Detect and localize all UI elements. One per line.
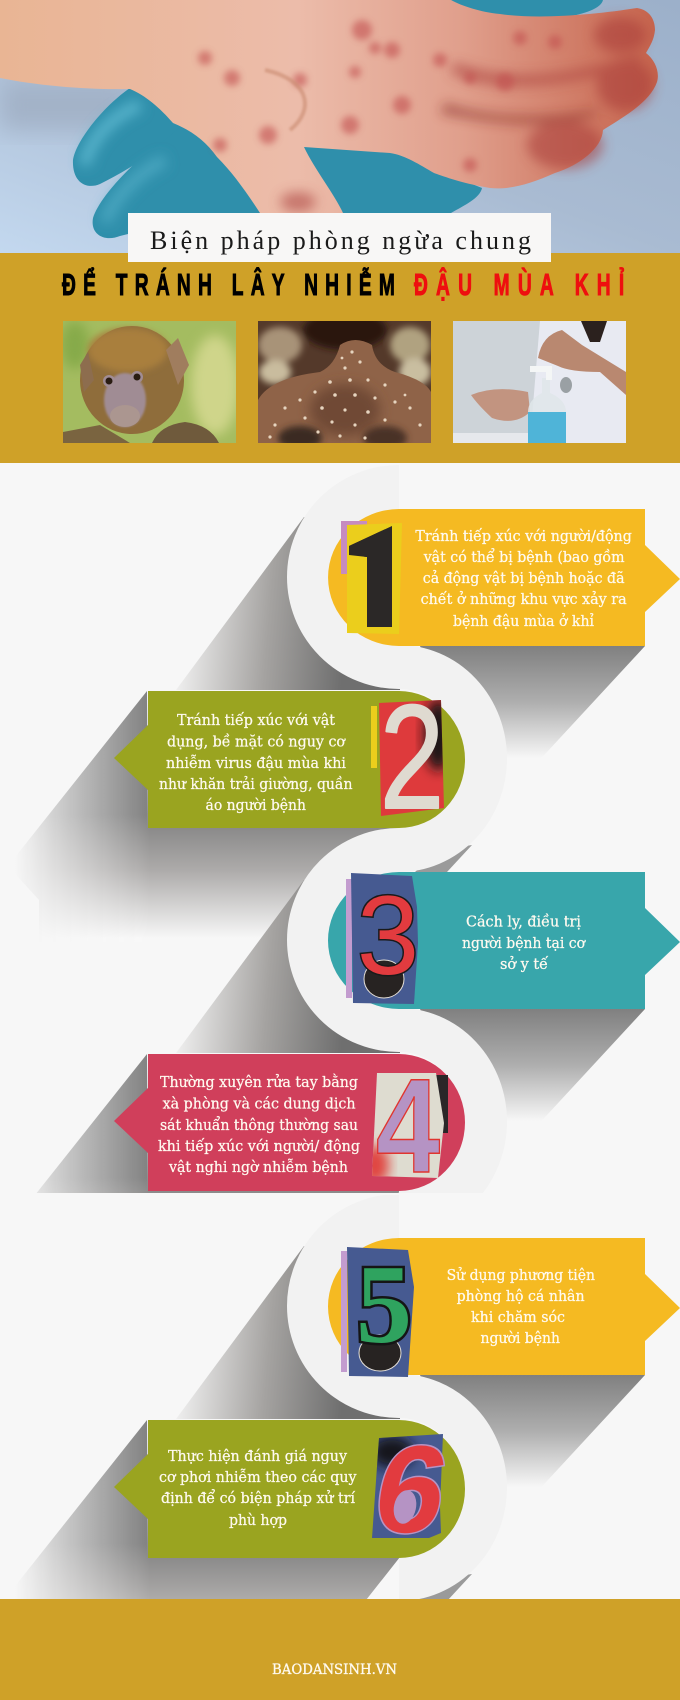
panel: step 3 [328,872,680,1009]
panel: step 6 [114,1420,465,1559]
photo: patient's back with lesions [258,321,431,443]
panel: step 5 [328,1238,680,1377]
icon: hand [0,0,658,213]
footer band [0,1599,680,1700]
text: step 4: Thường xuyên rửa tay bằng [160,1073,358,1091]
icon: number 1 tile: 1 [329,491,413,659]
text: step 3: Cách ly, điều trị [466,912,581,930]
text: step 5: Sử dụng phương tiện [447,1266,595,1284]
text: step 6: định để có biện pháp xử trí [161,1489,355,1507]
subtitle box [128,213,551,262]
panel: step 4 [114,1052,465,1201]
text: step 4: xà phòng và các dung dịch [163,1094,356,1112]
text: step 1: Tránh tiếp xúc với người/động [415,527,632,545]
text: step 1: cả động vật bị bệnh hoặc đã [423,569,625,587]
footer band: BAODANSINH.VN [272,1662,397,1678]
text: step 4: sát khuẩn thông thường sau [160,1116,358,1134]
text: step 5: người bệnh [480,1329,560,1347]
shadows and ribbon: steps 1 to 4 [25,517,645,1193]
subtitle box: Biện pháp phòng ngừa chung [150,226,531,255]
title: ĐỂ TRÁNH LÂY NHIỄM [62,266,395,302]
photo: washing hands with sanitizer [453,321,626,443]
text: step 6: phù hợp [229,1511,287,1529]
text: step 6 [159,1447,357,1529]
icon: blue glove [73,0,603,238]
text: step 2: dụng, bề mặt có nguy cơ [167,732,346,750]
text: step 2: áo người bệnh [206,796,306,814]
gold header band [0,253,680,463]
text: step 3 [462,912,586,973]
text: step 4: vật nghi ngờ nhiễm bệnh [168,1158,348,1176]
text: step 3: người bệnh tại cơ [462,934,586,952]
text: step 1: chết ở những khu vực xảy ra [421,590,627,608]
text: step 2: nhiễm virus đậu mùa khi [166,754,346,772]
icon: number 6 tile [372,1434,446,1538]
panel: step 2 [114,691,465,828]
text: step 5 [447,1266,595,1347]
text: step 5: phòng hộ cá nhân [457,1287,585,1305]
hero photo: hand with monkeypox rash [0,0,680,253]
text: step 4 [158,1073,360,1176]
text: step 6: cơ phơi nhiễm theo các quy [159,1468,357,1486]
text: step 4: khi tiếp xúc với người/ động [158,1137,360,1155]
text: step 1: bệnh đậu mùa ở khỉ [453,612,594,630]
text: step 1: vật có thể bị bệnh (bao gồm [423,548,624,566]
shadows and ribbon: steps 5 and 6 [25,1246,645,1599]
icon: number 6 tile: 6 [365,1421,458,1559]
icon: number 1 tile [341,521,402,634]
title: ĐẬU MÙA KHỈ [414,266,624,302]
title [62,266,624,302]
text: step 1 [415,527,632,630]
icon: number 3 tile: 3 [357,873,419,998]
icon: number 4 tile [372,1073,448,1178]
text: step 2 [159,711,353,814]
panel: step 1 [328,509,680,646]
icon: number 4 tile: 4 [376,1052,440,1201]
icon: number 5 tile: 5 [356,1243,412,1367]
text: step 5: khi chăm sóc [471,1308,565,1326]
icon: number 2 tile: 2 [380,675,444,840]
text: step 2: Tránh tiếp xúc với vật [177,711,335,729]
text: step 6: Thực hiện đánh giá nguy [168,1447,347,1465]
text: step 2: như khăn trải giường, quần [159,775,353,793]
photo: monkey [61,321,239,443]
text: step 3: sở y tế [500,955,549,973]
icon: number 2 tile [371,700,444,816]
